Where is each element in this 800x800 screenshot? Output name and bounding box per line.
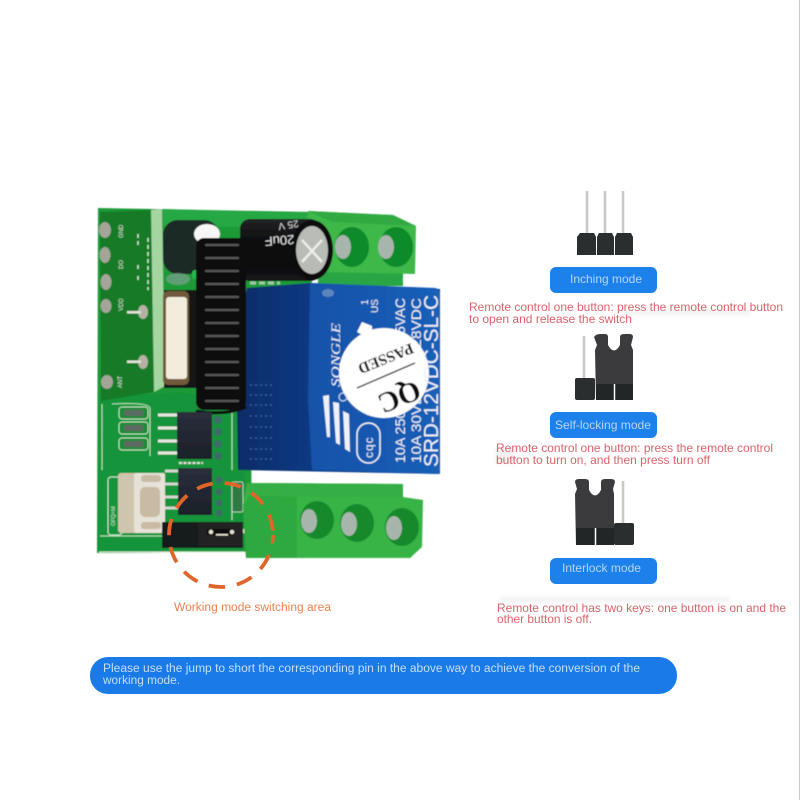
bottom instruction banner: working mode. [102, 675, 180, 687]
receiver daughter board [99, 209, 165, 401]
lower screw terminal [243, 483, 423, 558]
inching mode description: Remote control one button: press the remote control button [469, 300, 783, 314]
electrolytic capacitor: 20uF [264, 232, 295, 249]
push button [118, 473, 165, 533]
relay markings: SONGLE [328, 323, 343, 387]
relay ratings: 10A 250VAC 10A 125VAC [392, 298, 408, 463]
label: inching mode [550, 267, 657, 293]
relay markings: US [370, 299, 381, 313]
relay [236, 283, 443, 474]
small capacitor [163, 220, 220, 285]
inching mode description [469, 300, 783, 326]
relay markings [323, 295, 443, 467]
label: interlock mode: Interlock mode [562, 561, 641, 575]
label: self-locking mode: Self-locking mode [555, 418, 651, 432]
relay sticker [339, 322, 429, 419]
receiver daughter board: ANT [118, 376, 124, 388]
relay markings: 1 [360, 299, 371, 305]
crystal [163, 290, 200, 388]
interlock mode description: other button is off. [497, 612, 592, 626]
receiver daughter board: DO [119, 260, 125, 269]
relay ratings [392, 298, 424, 463]
bottom instruction banner: Please use the jump to short the corresponding pin in the above way to achieve the conversion of the [103, 663, 640, 675]
antenna coil [196, 238, 246, 413]
relay markings: cqc [362, 436, 376, 458]
icon: interlock mode jumper [575, 479, 634, 545]
electrolytic capacitor: 25 V [277, 217, 299, 232]
electrolytic capacitor [240, 217, 333, 281]
self-locking mode description: Remote control one button: press the remote control [496, 441, 773, 455]
label: inching mode: Inching mode [570, 272, 642, 286]
chips [158, 412, 212, 515]
jumper block [162, 522, 255, 548]
circuit board: OFQ=M [111, 506, 117, 526]
relay sticker: QC [373, 374, 425, 419]
bottom instruction banner [90, 657, 677, 694]
icon: inching mode pins [577, 191, 633, 255]
receiver daughter board: GND [119, 224, 125, 238]
circuit board [97, 208, 312, 553]
interlock mode description: Remote control has two keys: one button is on and the [497, 601, 786, 615]
right edge line [799, 0, 800, 800]
relay ratings: 10A 30VDC 10A 28VDC [408, 298, 424, 463]
working mode area caption: Working mode switching area [174, 602, 332, 614]
dashed highlight circle [169, 483, 273, 587]
label: interlock mode [550, 558, 657, 584]
icon: self-locking mode jumper [575, 334, 633, 400]
label: self-locking mode [550, 412, 657, 438]
self-locking mode description [496, 441, 773, 467]
relay markings: SRD-12VDC-SL-C [421, 295, 443, 467]
relay board photo illustration [97, 208, 443, 558]
upper screw terminal [304, 211, 416, 286]
faint text smudges [495, 310, 750, 602]
inching mode description: to open and release the switch [469, 312, 632, 326]
self-locking mode description: button to turn on, and then press turn off [496, 453, 711, 467]
relay sticker: PASSED [355, 339, 416, 377]
receiver daughter board: VDD [119, 298, 125, 311]
interlock mode description [497, 601, 786, 626]
